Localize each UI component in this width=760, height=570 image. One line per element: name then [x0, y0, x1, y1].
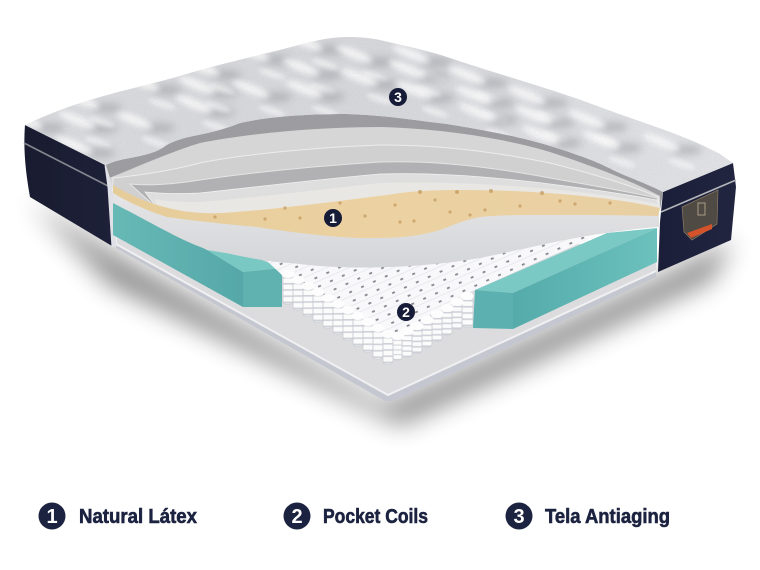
- legend item: Natural Látex: 1: [46, 506, 58, 528]
- label tag: [682, 190, 718, 240]
- legend item: Natural Látex: [38, 502, 197, 530]
- number marker 3: 3: [394, 89, 402, 105]
- number marker 2: 2: [402, 304, 410, 320]
- teal foam left: [113, 202, 282, 307]
- number marker 2: [397, 303, 415, 321]
- legend item: Tela Antiaging: Tela Antiaging: [545, 506, 670, 528]
- legend item: Tela Antiaging: 3: [513, 506, 525, 528]
- tufts: [25, 38, 730, 191]
- number marker 3: [389, 88, 407, 106]
- coil caps: [282, 270, 474, 340]
- comfort foam layers: [106, 114, 663, 218]
- mattress: [24, 37, 736, 401]
- base board: [116, 200, 656, 401]
- legend item: Natural Látex: Natural Látex: [79, 506, 197, 528]
- number marker 1: [324, 209, 342, 227]
- coil columns: [283, 273, 473, 364]
- legend: [38, 502, 670, 530]
- legend item: Pocket Coils: 2: [291, 506, 303, 528]
- right navy side panel with label: [658, 163, 736, 272]
- floor shadow: [30, 200, 733, 425]
- latex pores: [213, 189, 612, 224]
- quilted top cover: [25, 37, 733, 192]
- number marker 1: 1: [329, 210, 337, 226]
- legend item: Pocket Coils: [284, 502, 428, 530]
- pocket coils: [267, 236, 596, 364]
- coil top surface: [267, 236, 596, 340]
- white foam layer: [113, 190, 659, 268]
- latex layer: [113, 185, 660, 238]
- left navy side panel: [24, 125, 114, 247]
- legend item: Pocket Coils: Pocket Coils: [323, 506, 428, 528]
- teal foam right: [473, 228, 657, 329]
- legend item: Tela Antiaging: [506, 502, 670, 530]
